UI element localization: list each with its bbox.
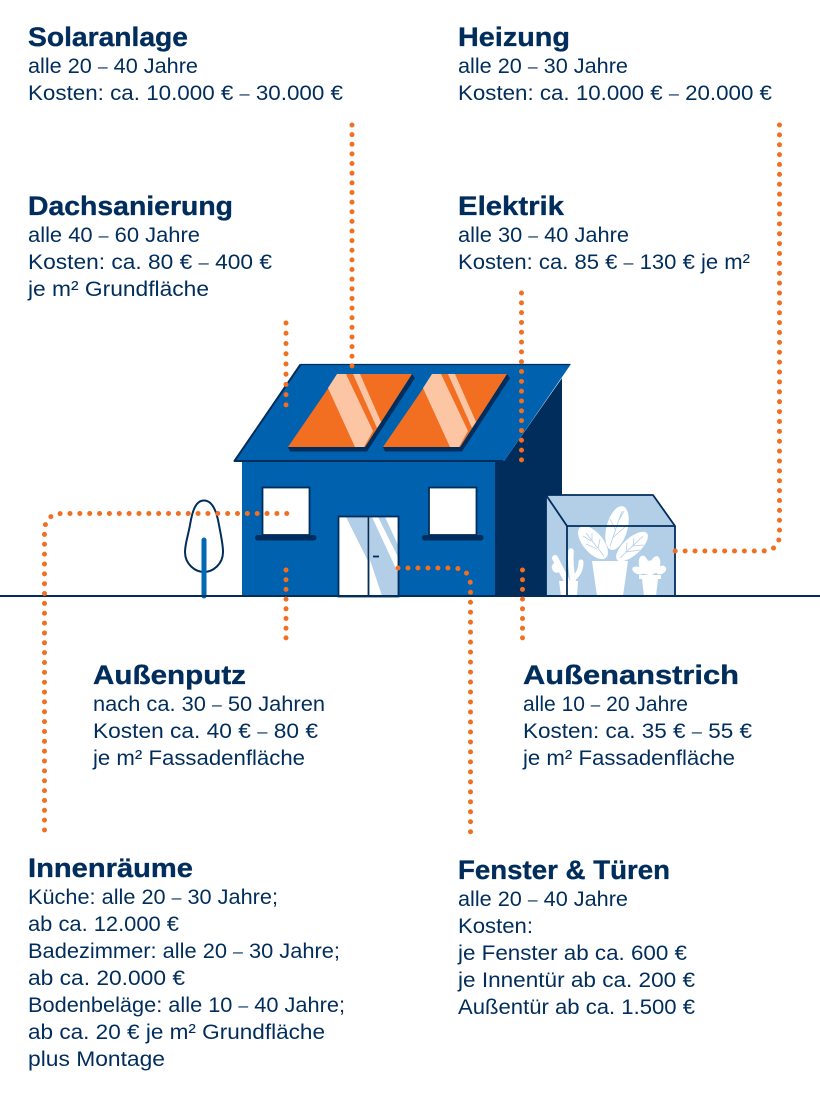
text block: Außenputz: je m² Fassadenfläche <box>92 747 305 770</box>
leaf veins <box>583 511 644 558</box>
house side wall <box>495 378 562 596</box>
text block: Dachsanierung: Dachsanierung <box>28 191 233 221</box>
dotted connector: Außenanstrich <box>520 570 525 638</box>
text block: Elektrik <box>458 191 750 274</box>
text block: Dachsanierung: je m² Grundfläche <box>27 278 209 301</box>
text block: Außenanstrich: Kosten: ca. 35 € – 55 € <box>523 720 752 743</box>
solar panel right <box>383 374 510 452</box>
text block: Solaranlage: Kosten: ca. 10.000 € – 30.000 € <box>28 82 343 105</box>
illustration: greenhouse with plants <box>546 495 675 596</box>
text block: Fenster und Türen: alle 20 – 40 Jahre <box>458 888 628 911</box>
text block: Außenanstrich: alle 10 – 20 Jahre <box>523 693 688 716</box>
text block: Fenster und Türen: Außentür ab ca. 1.500 € <box>458 996 695 1019</box>
text block: Innenräume: ab ca. 20 € je m² Grundfläche <box>28 1021 325 1044</box>
dotted connector: Heizung <box>675 125 780 551</box>
dotted connector: Solaranlage <box>350 125 354 366</box>
dotted connector: Innenräume <box>44 514 287 830</box>
text block: Fenster und Türen: je Innentür ab ca. 200 € <box>457 969 695 992</box>
dotted connector: Fenster und Türen <box>398 568 470 832</box>
icon: tree <box>185 500 223 596</box>
text block: Elektrik: Elektrik <box>458 191 565 221</box>
text block: Innenräume: Bodenbeläge: alle 10 – 40 Jahre; <box>28 994 345 1017</box>
text block: Fenster und Türen: Fenster & Türen <box>458 855 670 885</box>
dotted connector: Außenputz <box>284 570 288 638</box>
text block: Innenräume: Innenräume <box>28 853 193 883</box>
text block: Heizung: Heizung <box>458 22 570 52</box>
text block: Außenanstrich: je m² Fassadenfläche <box>522 747 735 770</box>
solar panel left <box>288 374 415 452</box>
text block: Heizung <box>458 22 772 105</box>
text block: Elektrik: alle 30 – 40 Jahre <box>458 224 629 247</box>
greenhouse frame <box>546 495 675 596</box>
text block: Außenputz: Kosten ca. 40 € – 80 € <box>93 720 318 743</box>
text block: Dachsanierung: alle 40 – 60 Jahre <box>28 224 200 247</box>
text block: Außenputz: Außenputz <box>93 660 246 690</box>
illustration: house <box>234 364 571 596</box>
text block: Elektrik: Kosten: ca. 85 € – 130 € je m² <box>458 251 750 274</box>
text block: Außenanstrich: Außenanstrich <box>523 660 739 690</box>
text block: Innenräume: plus Montage <box>28 1048 165 1071</box>
ground line <box>0 595 820 597</box>
text block: Heizung: alle 20 – 30 Jahre <box>458 55 628 78</box>
text block: Dachsanierung <box>27 191 272 301</box>
roof <box>234 364 571 461</box>
text block: Innenräume: ab ca. 20.000 € <box>28 967 185 990</box>
door <box>338 516 398 596</box>
house front wall <box>242 461 495 596</box>
window left <box>255 488 316 540</box>
text block: Fenster und Türen: je Fenster ab ca. 600 € <box>457 942 687 965</box>
text block: Solaranlage: Solaranlage <box>28 22 188 52</box>
text block: Innenräume: Badezimmer: alle 20 – 30 Jahre; <box>28 940 340 963</box>
dotted connector: Dachsanierung <box>284 323 288 405</box>
text block: Innenräume: ab ca. 12.000 € <box>28 913 179 936</box>
window right <box>422 488 484 540</box>
text block: Innenräume: Küche: alle 20 – 30 Jahre; <box>28 886 278 909</box>
text block: Außenputz: nach ca. 30 – 50 Jahren <box>93 693 325 716</box>
text block: Innenräume <box>28 853 345 1071</box>
text block: Solaranlage: alle 20 – 40 Jahre <box>28 55 198 78</box>
text block: Außenanstrich <box>522 660 752 770</box>
text block: Solaranlage <box>28 22 343 105</box>
text block: Fenster und Türen: Kosten: <box>458 915 533 938</box>
plants <box>550 504 668 596</box>
dotted connector: Elektrik <box>519 293 524 460</box>
text block: Fenster und Türen <box>457 855 695 1019</box>
text block: Heizung: Kosten: ca. 10.000 € – 20.000 € <box>458 82 772 105</box>
text block: Außenputz <box>92 660 325 770</box>
text block: Dachsanierung: Kosten: ca. 80 € – 400 € <box>28 251 272 274</box>
